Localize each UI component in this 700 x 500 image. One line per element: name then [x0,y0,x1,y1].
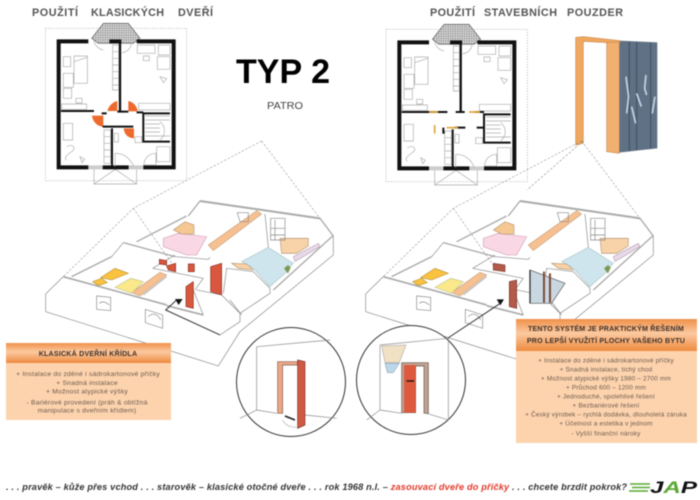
panel list: + Snadná instalace, tichý chod [560,366,653,374]
heading: pocket doors: POUZDER [567,7,623,19]
heading: classic doors: DVEŘÍ [178,6,214,19]
footer slogan: . . . pravěk – kůže přes vchod . . . starověk – klasické otočné dveře . . . rok 1968 n.l. – zasouvací dveře do příčky . . . chcete brzdit pokrok? [6,482,627,492]
view marker [175,299,183,305]
panel list: + Instalace do zděné i sádrokartonové příčky [538,358,674,364]
dashed line from door to isometric [527,141,583,190]
panel list: + Průchod 600 – 1200 mm [566,383,646,391]
panel heading text: KLASICKÁ DVEŘNÍ KŘÍDLA [39,349,137,358]
panel list: + Český výrobek – rychlá dodávka, dlouholetá záruka [525,409,687,418]
panel list: + Bezbariérové řešení [573,402,639,409]
subtitle: PATRO [267,101,303,112]
isometric floor: pocket doors [366,141,653,366]
floor plan: pocket doors [386,24,527,185]
sliding door illustration [576,37,657,153]
panel list: + Možnost atypické výšky 1980 – 2700 mm [541,376,671,382]
heading: classic doors [32,6,214,19]
panel: classic door leaves [6,343,171,420]
sliding door cutaway [530,270,565,303]
heading: pocket doors: STAVEBNÍCH [484,6,557,19]
heading: pocket doors: POUŽITÍ [430,6,476,19]
heading: pocket doors [430,6,623,19]
detail circle: classic door [236,328,346,436]
panel list: + Jednoduché, spolehlivé řešení [557,393,655,400]
panel list: - Vyšší finanční nároky [571,430,641,438]
panel list [525,358,687,438]
panel list: manipulace s dveřním křídlem) [38,408,136,414]
panel heading text: TENTO SYSTÉM JE PRAKTICKÝM ŘEŠENÍM [528,324,684,333]
panel header [6,343,171,363]
panel heading text [527,324,685,345]
door: red leaf front [186,282,193,308]
panel list: + Účelnost a estetika v jednom [559,418,653,427]
floor plan: classic doors [45,23,187,184]
panel list: - Bariérové provedení (práh & obtížná [26,400,148,406]
panel list: + Možnost atypické výšky [46,388,128,396]
panel list: + Snadná instalace [56,380,118,387]
panel heading text: PRO LEPŠÍ VYUŽITÍ PLOCHY VAŠEHO BYTU [527,336,685,345]
isometric floor: classic doors [46,141,333,366]
panel list: + Instalace do zděné i sádrokartonové příčky [16,371,160,378]
logo: JAP [629,478,698,497]
view marker [497,299,504,305]
heading: classic doors: KLASICKÝCH [91,6,164,19]
detail circle: pocket door [356,326,466,434]
door detail front [493,263,517,308]
door: red leaf back [159,259,194,272]
panel list [16,371,160,414]
panel header [516,319,697,351]
heading: classic doors: POUŽITÍ [32,6,79,19]
logo: JAP: JA P [650,478,698,497]
title: TYP 2 [236,53,330,91]
door: red leaf [211,263,222,295]
panel: pocket door system [516,319,697,443]
